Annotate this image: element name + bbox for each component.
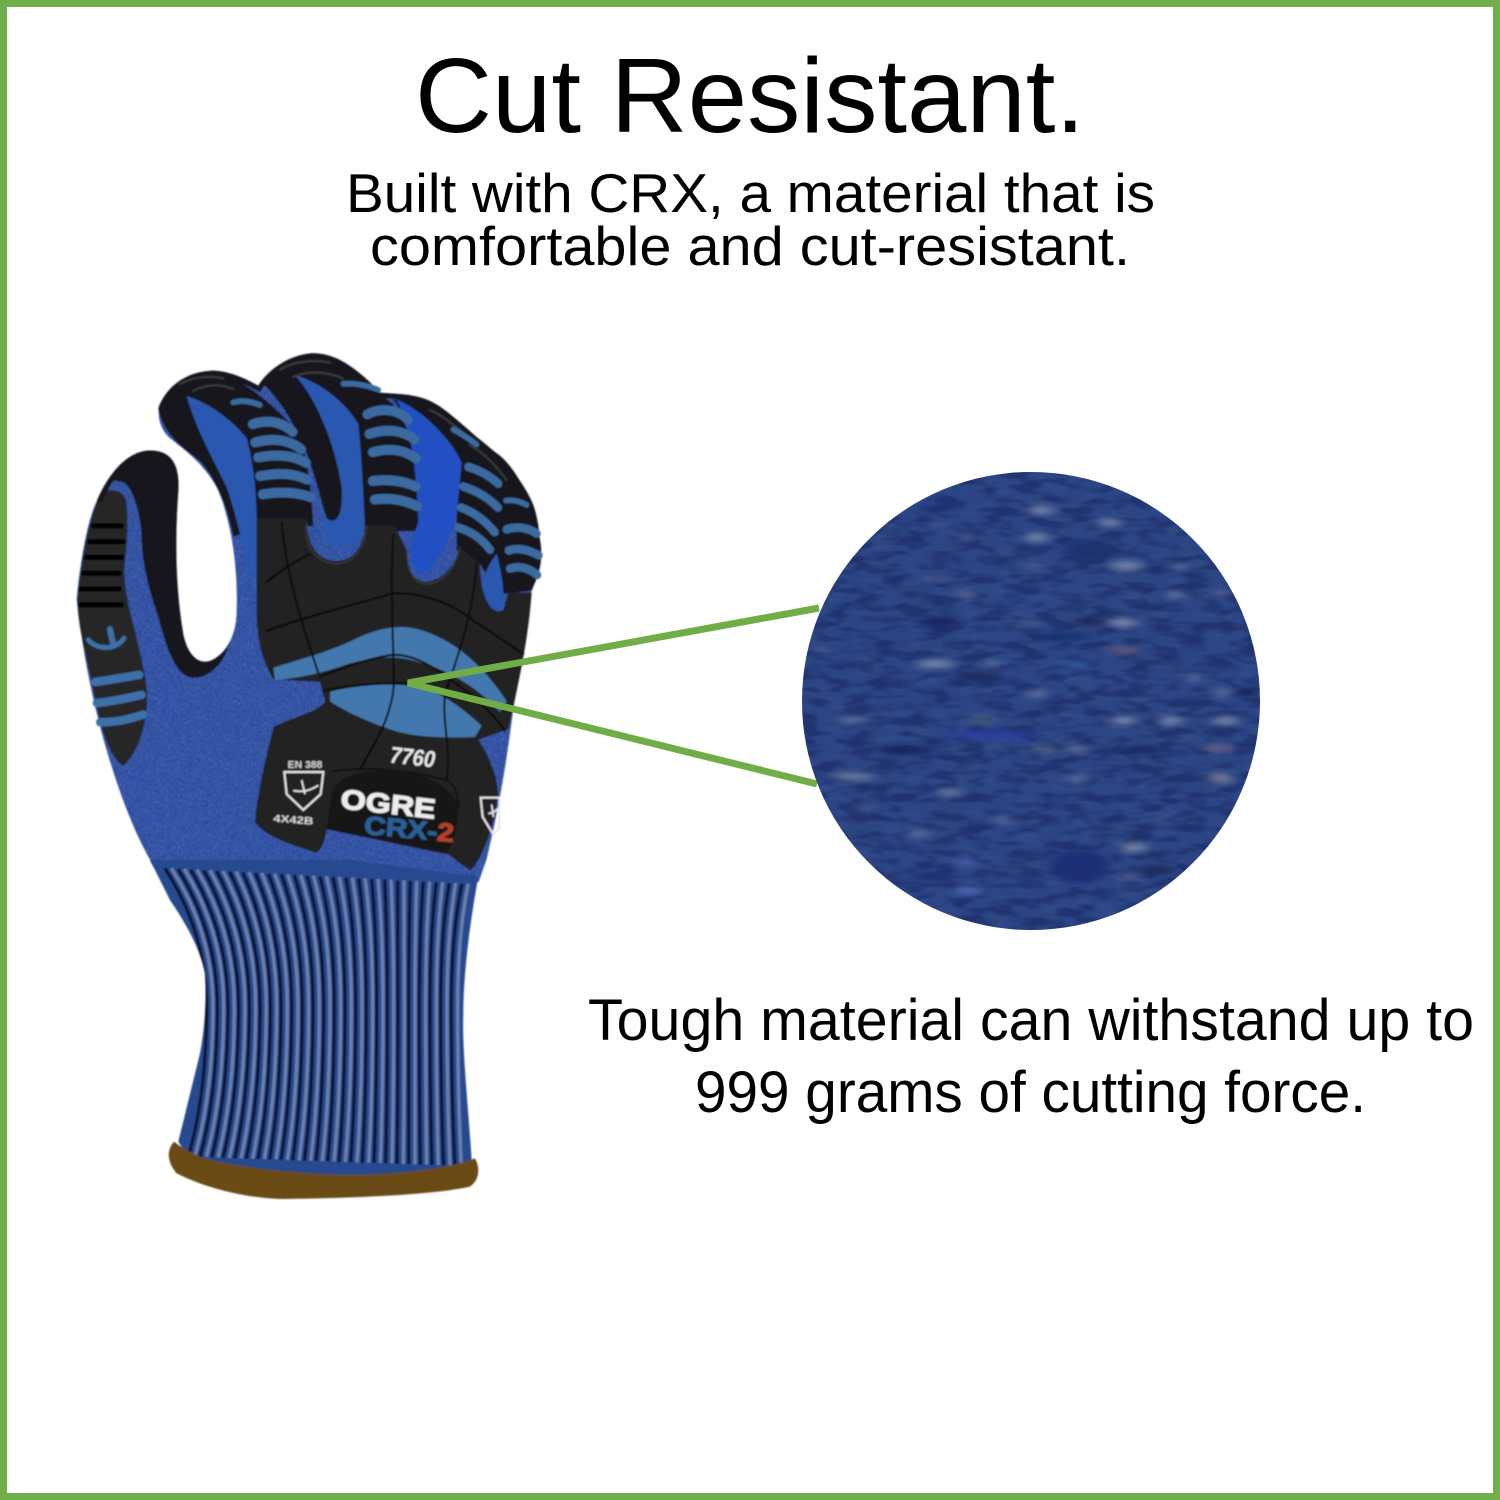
glove cuff [150, 860, 478, 1199]
armour creases [267, 522, 523, 817]
text: product line: CRX-2 [363, 811, 455, 848]
thumb grip band [110, 450, 230, 678]
magnified fabric circle [800, 470, 1263, 933]
subtitle [346, 162, 1155, 277]
glove illustration [60, 340, 560, 1199]
cuff hem [169, 1142, 478, 1199]
fabric mottling [800, 470, 1263, 933]
text: brand: OGRE [339, 784, 437, 825]
thumb pad [77, 490, 147, 766]
body text [588, 988, 1474, 1125]
subtitle: comfortable and cut-resistant. [370, 215, 1130, 277]
title: Cut Resistant. [415, 37, 1085, 155]
body text: Tough material can withstand up to [588, 988, 1474, 1053]
ring and little fingers [393, 399, 540, 594]
fingertip ridges [180, 361, 507, 480]
middle finger [263, 356, 419, 531]
subtitle: Built with CRX, a material that is [346, 162, 1155, 224]
index finger [158, 371, 313, 536]
text: en 388: EN 388 [288, 760, 323, 771]
finger ribs [233, 384, 539, 575]
icon: certification shield right [481, 798, 499, 834]
fabric shading [877, 505, 1257, 883]
armour badge panel [327, 771, 458, 853]
text: rating: 4X42B [273, 814, 314, 828]
icon: certification shield left [284, 772, 323, 810]
fabric highlights [812, 505, 1238, 895]
fingertip rim [97, 353, 541, 589]
glove hand [76, 352, 544, 883]
callout arrows [408, 608, 819, 784]
armour blue panels [273, 627, 507, 712]
thumb ribs [81, 526, 143, 722]
body text: 999 grams of cutting force. [695, 1060, 1366, 1125]
text: model number: 7760 [389, 742, 437, 773]
palm armour [255, 519, 532, 870]
knit base [77, 353, 541, 882]
